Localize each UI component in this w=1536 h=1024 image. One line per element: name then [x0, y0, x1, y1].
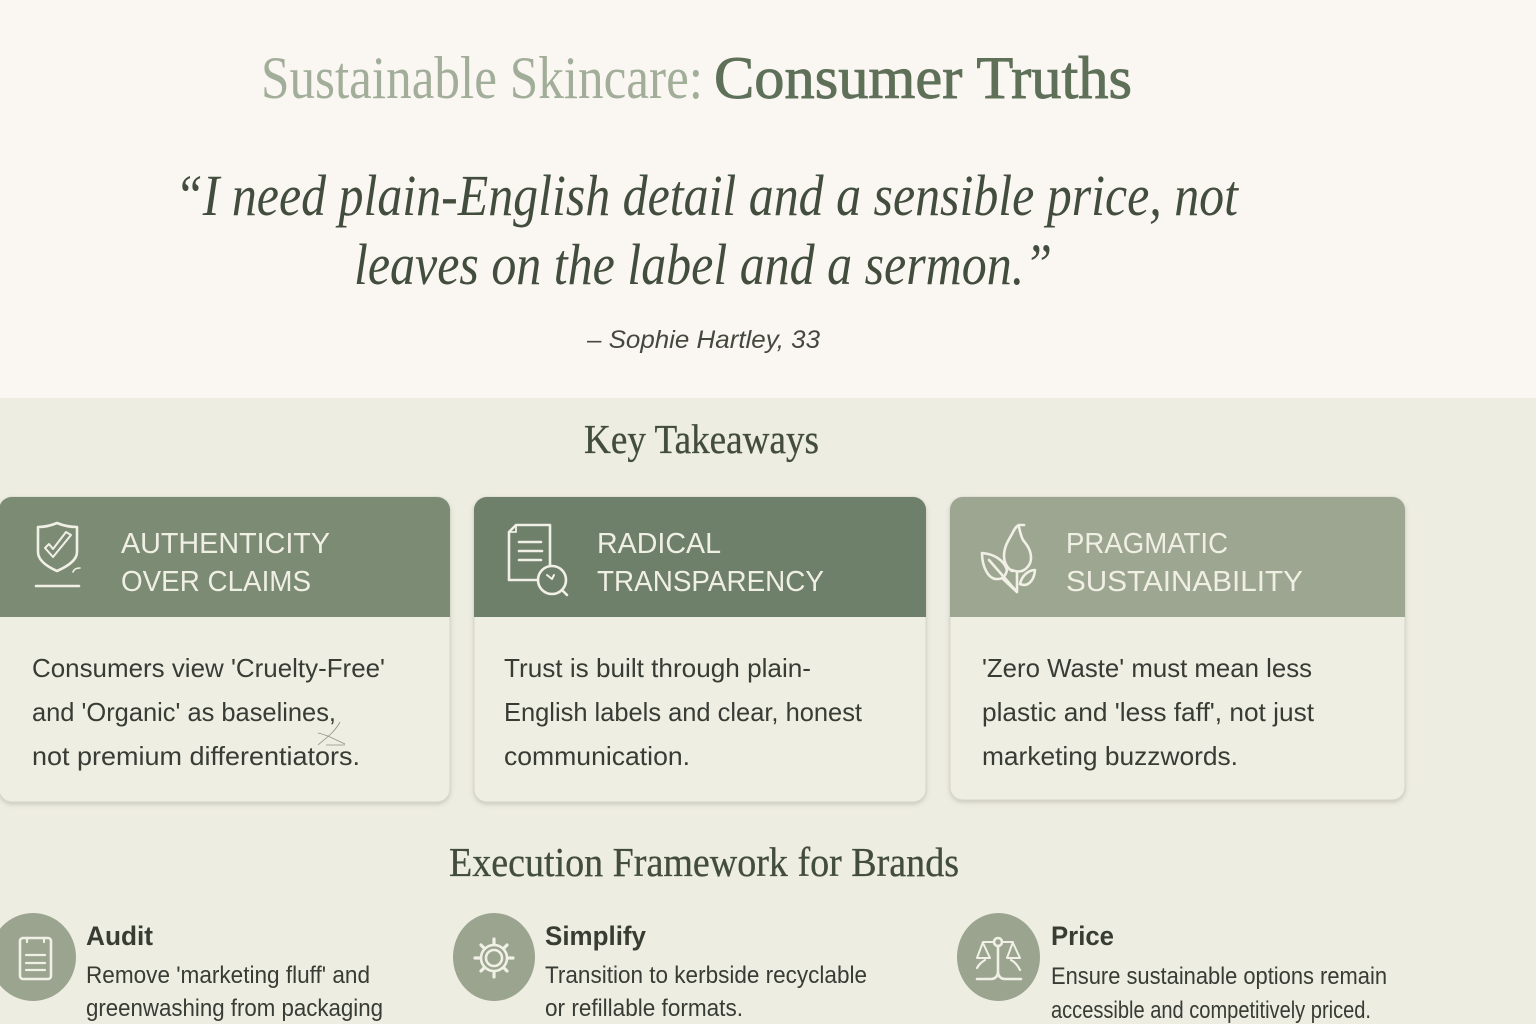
icon: gear: [453, 913, 535, 1001]
panel: authenticity over claims: [0, 497, 450, 802]
card heading: RADICAL: [597, 528, 721, 560]
card heading: [1066, 528, 1303, 598]
icon: shield with check: [36, 523, 80, 586]
card text: [982, 653, 1315, 771]
card heading: SUSTAINABILITY: [1066, 566, 1303, 598]
step: price: [957, 913, 1387, 1024]
title: Sustainable Skincare:: [261, 45, 703, 111]
card text: communication.: [504, 741, 690, 771]
card text: English labels and clear, honest: [504, 697, 863, 727]
step text: greenwashing from packaging: [86, 995, 383, 1022]
title: Consumer Truths: [714, 45, 1132, 111]
card heading: [121, 528, 330, 598]
icon: clipboard: [0, 913, 76, 1001]
step text: Price: [1051, 921, 1114, 951]
card heading: TRANSPARENCY: [597, 566, 824, 598]
card heading: AUTHENTICITY: [121, 528, 330, 560]
step text: [1051, 921, 1387, 1024]
panel: radical transparency: [474, 497, 926, 802]
card text: 'Zero Waste' must mean less: [982, 653, 1312, 683]
step text: Simplify: [545, 921, 646, 951]
step text: [545, 921, 867, 1022]
icon: balance scales: [957, 913, 1040, 1001]
card text: marketing buzzwords.: [982, 741, 1238, 771]
card text: plastic and 'less faff', not just: [982, 697, 1315, 727]
card heading: PRAGMATIC: [1066, 528, 1228, 560]
panel: pragmatic sustainability: [950, 497, 1405, 800]
attribution: – Sophie Hartley, 33: [586, 326, 820, 354]
card text: Trust is built through plain-: [504, 653, 811, 683]
step text: Remove 'marketing fluff' and: [86, 962, 370, 989]
quote: leaves on the label and a sermon.”: [354, 232, 1052, 297]
heading: execution framework: Execution Framework for Brands: [449, 839, 959, 885]
step: audit: [0, 913, 383, 1022]
step text: accessible and competitively priced.: [1051, 997, 1371, 1024]
step text: Ensure sustainable options remain: [1051, 963, 1387, 990]
card text: and 'Organic' as baselines,: [32, 697, 336, 727]
step text: Audit: [86, 921, 153, 951]
quote: [175, 163, 1240, 297]
card heading: OVER CLAIMS: [121, 566, 311, 598]
card text: [504, 653, 863, 771]
icon: fruit and leaves: [982, 525, 1035, 592]
card text: Consumers view 'Cruelty-Free': [32, 653, 385, 683]
step text: Transition to kerbside recyclable: [545, 962, 867, 989]
quote: “I need plain-English detail and a sensible price, not: [175, 163, 1240, 228]
card text: not premium differentiators.: [32, 741, 360, 771]
card heading: [597, 528, 824, 598]
step text: or refillable formats.: [545, 995, 743, 1022]
title: [261, 45, 1132, 111]
card text: [32, 653, 385, 771]
heading: key takeaways: Key Takeaways: [584, 416, 819, 462]
icon: document with magnifier: [509, 525, 567, 595]
step: simplify: [453, 913, 867, 1022]
step text: [86, 921, 383, 1022]
